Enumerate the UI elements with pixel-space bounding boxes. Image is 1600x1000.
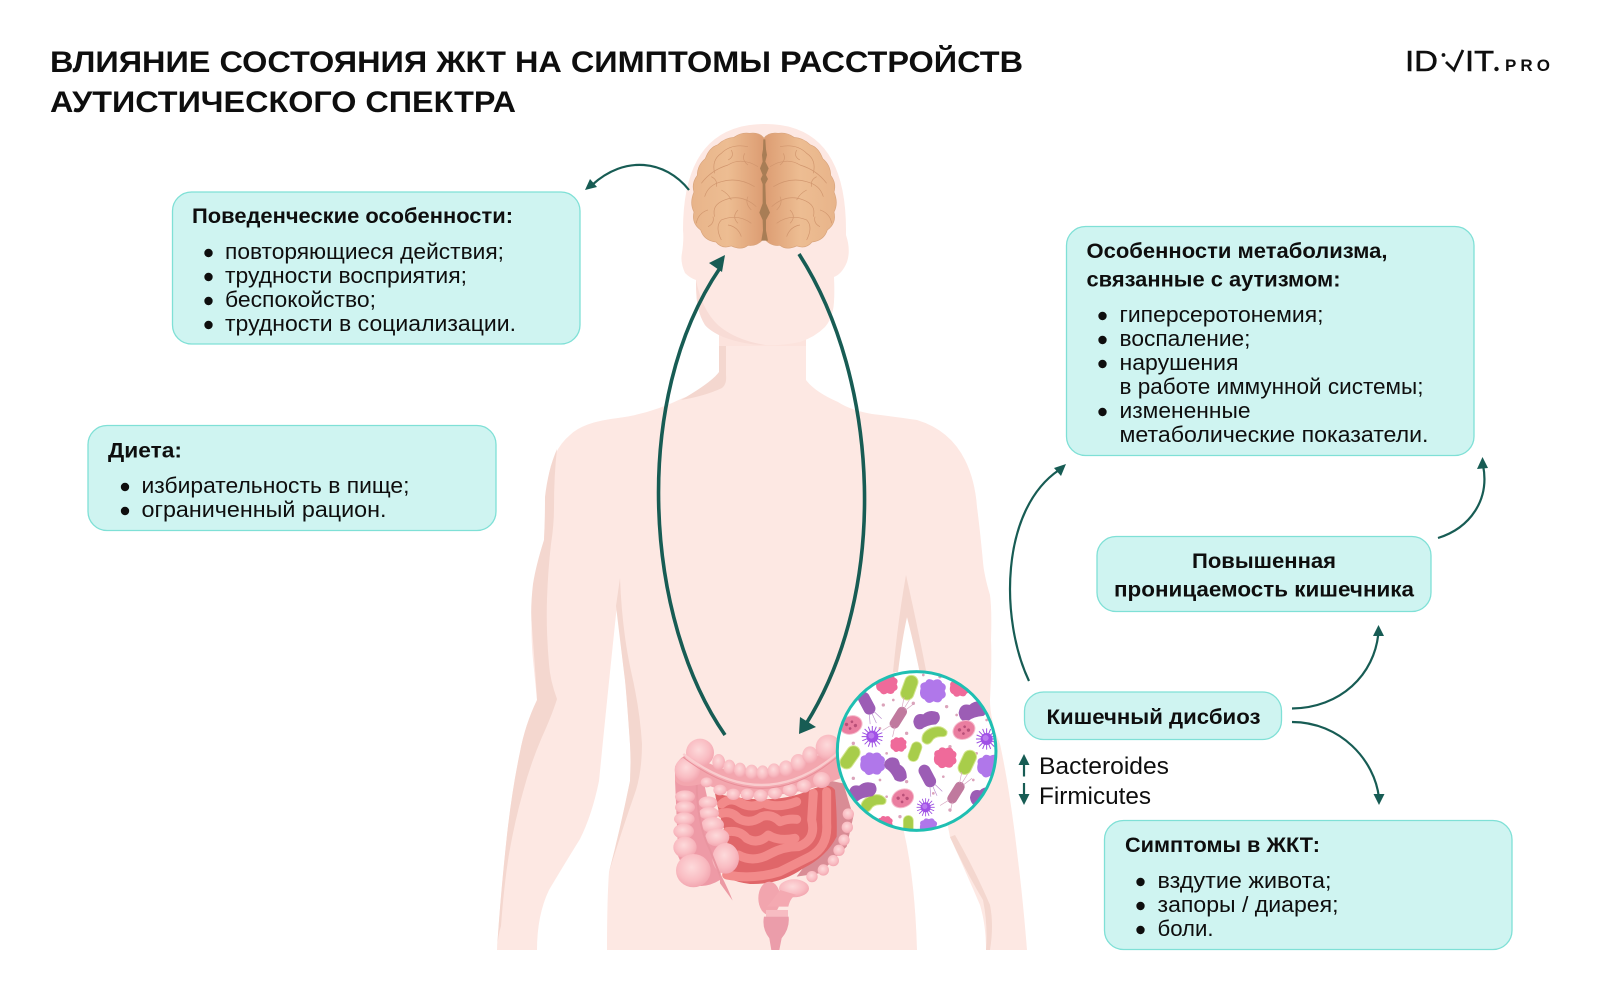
rectum: [758, 879, 809, 950]
icon: intestines: [673, 735, 854, 950]
pink blobs: [876, 675, 969, 830]
panel: behaviour: Поведенческие особенности:: [192, 204, 513, 228]
big arrow: intestines to brain: [659, 255, 725, 735]
transverse colon: [675, 735, 841, 802]
microbiome circle: [837, 672, 1002, 834]
title: ВЛИЯНИЕ СОСТОЯНИЯ ЖКТ НА СИМПТОМЫ РАССТРОЙСТВ: [50, 45, 1023, 79]
brain left hemisphere: [692, 133, 764, 248]
panel: GI symptoms: Симптомы в ЖКТ:: [1125, 833, 1320, 857]
pink oval bacteria: [837, 713, 978, 811]
panel: metabolism: метаболические показатели.: [1120, 422, 1428, 447]
panel: behaviour: повторяющиеся действия;: [225, 239, 504, 264]
firmicutes down label: Firmicutes: [1039, 783, 1151, 810]
arrow: permeability to metabolism: [1438, 457, 1488, 538]
panel: behaviour: [172, 192, 580, 344]
arrow: dysbiosis to permeability: [1292, 625, 1384, 708]
panel: metabolism: воспаление;: [1120, 326, 1250, 351]
lilac blobs: [860, 679, 1002, 834]
panel: behaviour: беспокойство;: [225, 287, 376, 312]
panel: GI symptoms: [1104, 820, 1512, 950]
arrow: dysbiosis to symptoms: [1292, 722, 1384, 805]
arrow: brain to behaviour: [585, 165, 689, 190]
panel: GI symptoms: боли.: [1158, 916, 1214, 941]
panel: metabolism: в работе иммунной системы;: [1120, 374, 1424, 399]
panel: intestinal permeability: Повышенная: [1192, 549, 1336, 573]
panel: metabolism: Особенности метаболизма,: [1086, 239, 1388, 263]
title: [50, 45, 1023, 119]
panel: diet: избирательность в пище;: [142, 473, 410, 498]
arrow: dysbiosis to metabolism: [1010, 464, 1066, 681]
panel: intestinal permeability: [1097, 536, 1431, 612]
panel: diet: ограниченный рацион.: [142, 497, 386, 522]
panel: intestinal permeability: проницаемость кишечника: [1114, 578, 1415, 602]
purple viruses: [862, 726, 997, 816]
brain right hemisphere: [764, 133, 836, 248]
panel: metabolism: [1066, 226, 1474, 456]
panel: GI symptoms: запоры / диарея;: [1158, 892, 1338, 917]
big arrow: brain to intestines: [799, 254, 865, 734]
green bacteria: [837, 673, 979, 834]
descending colon: [806, 808, 854, 882]
panel: metabolism: измененные: [1120, 398, 1250, 423]
icon: brain: [692, 133, 836, 248]
panel: metabolism: нарушения: [1120, 350, 1238, 375]
panel: diet: Диета:: [108, 438, 182, 462]
small intestine: [715, 786, 837, 884]
panel: dysbiosis: [1024, 692, 1282, 740]
panel: metabolism: гиперсеротонемия;: [1120, 302, 1324, 327]
bacteroides up label: Bacteroides: [1039, 753, 1169, 780]
ascending colon and cecum: [673, 780, 739, 901]
panel: diet: [88, 426, 496, 530]
logo: IT: [1465, 46, 1494, 78]
panel: dysbiosis: Кишечный дисбиоз: [1046, 705, 1260, 729]
logo: PRO: [1505, 56, 1550, 75]
body silhouette: [497, 335, 1027, 950]
logo: [1405, 46, 1550, 78]
head silhouette: [681, 124, 849, 346]
logo: ID: [1405, 46, 1438, 78]
title: АУТИСТИЧЕСКОГО СПЕКТРА: [50, 86, 516, 119]
panel: metabolism: связанные с аутизмом:: [1086, 268, 1340, 292]
panel: behaviour: трудности восприятия;: [225, 263, 467, 288]
dark purple blobs: [849, 701, 997, 805]
rods: [855, 690, 973, 812]
panel: behaviour: трудности в социализации.: [225, 311, 516, 336]
panel: GI symptoms: вздутие живота;: [1158, 868, 1332, 893]
scattered dots: [845, 674, 988, 818]
